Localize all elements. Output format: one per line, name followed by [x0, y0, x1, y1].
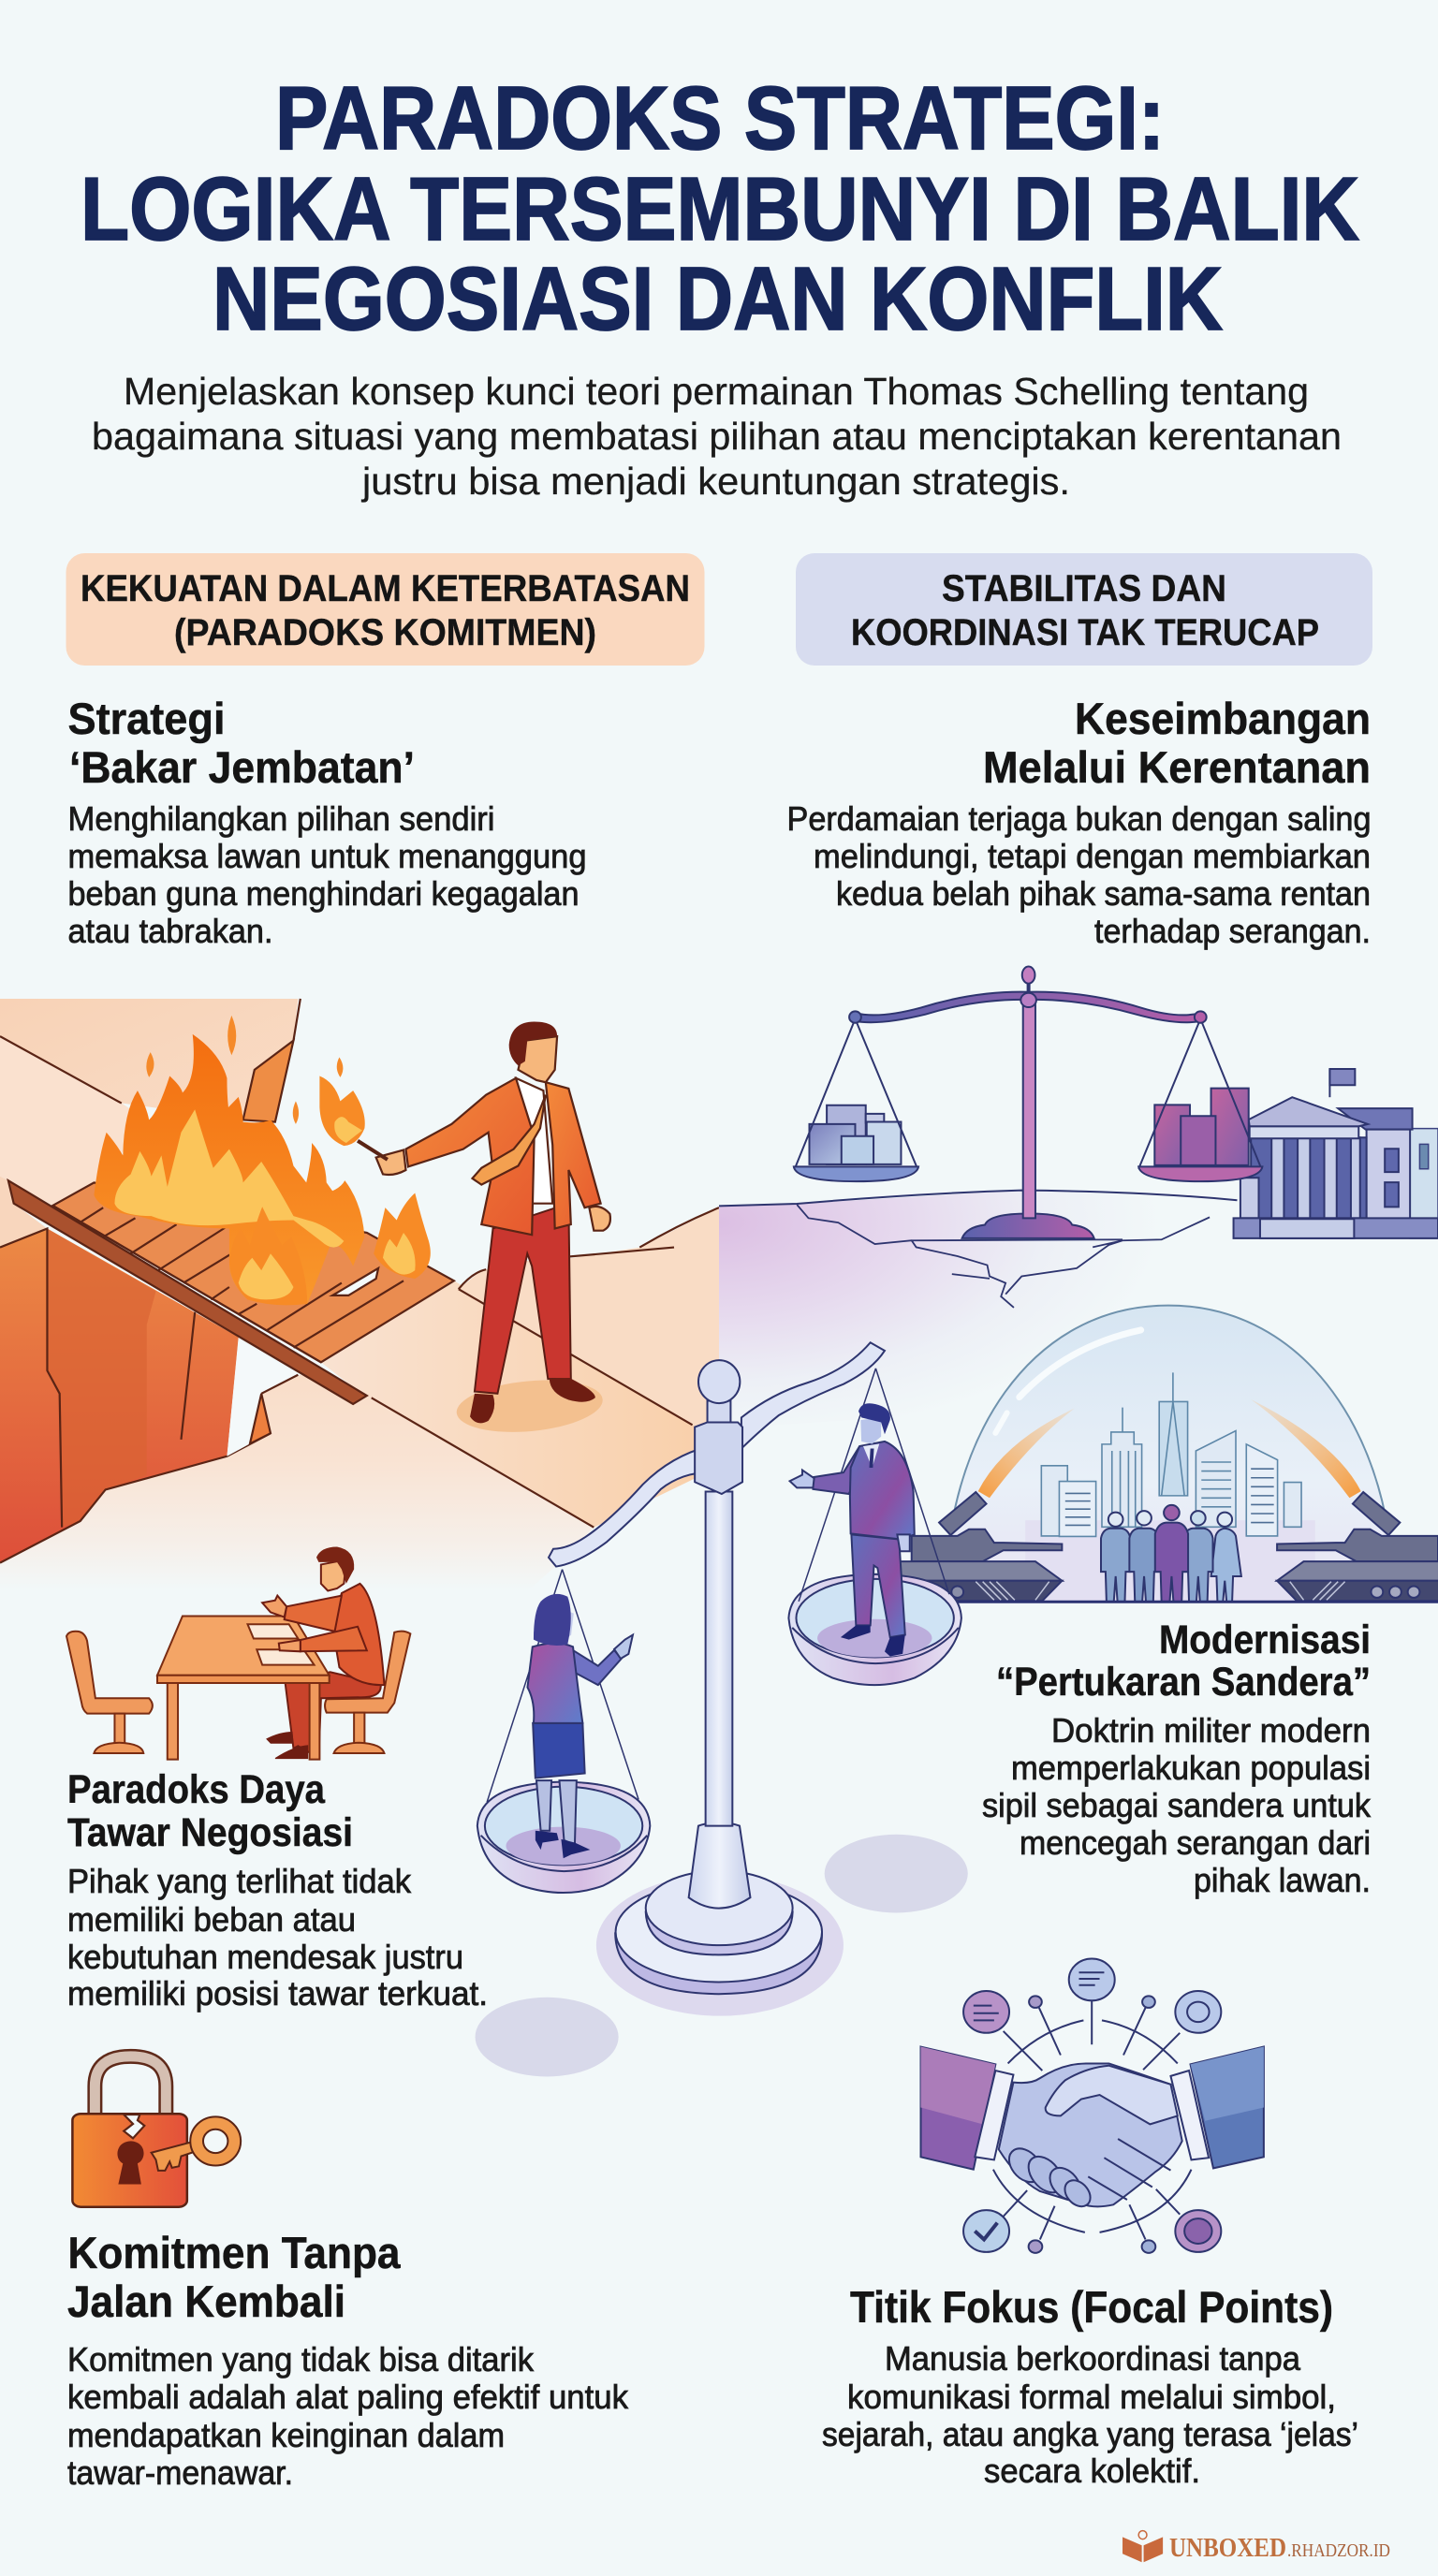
orange rock face	[243, 1041, 293, 1122]
left pan front rim	[481, 1836, 647, 1871]
text block: strategi bakar jembatan: Strategi	[67, 694, 225, 743]
text block: strategi bakar jembatan: Menghilangkan pilihan sendiri	[67, 799, 494, 838]
scale pillar	[706, 1491, 732, 1826]
title: NEGOSIASI DAN KONFLIK	[213, 249, 1223, 349]
right sleeve	[1191, 2047, 1264, 2168]
lavender ground	[719, 1191, 1438, 1428]
text block: titik fokus: sejarah, atau angka yang terasa ‘jelas’	[822, 2415, 1358, 2453]
glass dome with city	[945, 1306, 1394, 1602]
right tank	[1251, 1399, 1438, 1601]
text block: modernisasi pertukaran sandera: pihak lawan.	[1194, 1861, 1371, 1899]
scale head	[695, 1360, 742, 1494]
text block: paradoks daya tawar negosiasi: Tawar Negosiasi	[67, 1810, 353, 1855]
man figure	[790, 1403, 915, 1656]
column header: kekuatan dalam keterbatasan: (PARADOKS KOMITMEN)	[174, 612, 596, 653]
text block: strategi bakar jembatan: beban guna menghindari kegagalan	[67, 874, 579, 913]
upper ledge	[0, 1036, 147, 1206]
text block: komitmen tanpa jalan kembali: Komitmen yang tidak bisa ditarik	[67, 2340, 535, 2378]
logo text: .RHADZOR.ID	[1287, 2540, 1390, 2561]
small nodes	[1029, 1996, 1155, 2253]
far ground	[459, 1208, 719, 1440]
gap between cliffs	[227, 1339, 298, 1456]
text block: modernisasi pertukaran sandera: Modernisasi	[1159, 1617, 1371, 1662]
subtitle: bagaimana situasi yang membatasi pilihan atau menciptakan kerentanan	[92, 415, 1342, 458]
building	[1234, 1069, 1438, 1238]
clasped hands	[999, 2063, 1182, 2211]
canyon cliff	[0, 1228, 271, 1563]
ground cracks	[797, 1205, 1210, 1308]
seated man	[262, 1547, 384, 1685]
right chair	[325, 1632, 410, 1753]
table	[157, 1617, 330, 1760]
text block: komitmen tanpa jalan kembali: Jalan Kembali	[67, 2276, 345, 2326]
left scale pan with boxes	[794, 1018, 918, 1181]
text block: modernisasi pertukaran sandera: Doktrin militer modern	[1051, 1711, 1371, 1749]
text block: komitmen tanpa jalan kembali: tawar-menawar.	[67, 2453, 293, 2492]
left pan back with chains	[477, 1570, 650, 1893]
logo icon: open book	[1123, 2531, 1163, 2562]
node: globe	[1175, 2210, 1221, 2252]
text block: titik fokus: Manusia berkoordinasi tanpa	[885, 2339, 1301, 2378]
illustration: central balance scale with figures	[476, 1342, 968, 2076]
big flames	[94, 1016, 431, 1305]
group of civilians	[1101, 1505, 1241, 1602]
subtitle	[92, 370, 1342, 503]
illustration: balance scale, building and ground	[719, 967, 1438, 1602]
man with torch	[319, 1022, 610, 1438]
column header: kekuatan dalam keterbatasan: KEKUATAN DALAM KETERBATASAN	[81, 568, 690, 609]
text block: modernisasi pertukaran sandera: memperlakukan populasi	[1011, 1749, 1371, 1787]
scale arm left	[549, 1446, 709, 1567]
text block: modernisasi pertukaran sandera	[982, 1617, 1372, 1899]
illustration: handshake with focal nodes	[921, 1959, 1264, 2562]
path band	[321, 1281, 719, 1528]
scale base	[615, 1822, 822, 1994]
top scale stand	[849, 967, 1207, 1238]
scale arm right	[741, 1342, 885, 1449]
title	[81, 68, 1359, 349]
text block: keseimbangan melalui kerentanan: Perdamaian terjaga bukan dengan saling	[786, 799, 1371, 838]
node: document	[1069, 1959, 1115, 2000]
network arcs and spokes	[993, 2000, 1191, 2239]
text block: keseimbangan melalui kerentanan: melindungi, tetapi dengan membiarkan	[814, 837, 1371, 875]
text block: keseimbangan melalui kerentanan: kedua belah pihak sama-sama rentan	[836, 874, 1371, 913]
lower ground	[0, 1375, 594, 1591]
text block: komitmen tanpa jalan kembali: kembali adalah alat paling efektif untuk	[67, 2378, 629, 2416]
text block: paradoks daya tawar negosiasi	[67, 1767, 488, 2012]
illustration: negotiation table	[66, 1547, 410, 1760]
column header: stabilitas dan koordinasi: KOORDINASI TAK TERUCAP	[851, 612, 1319, 653]
column header: kekuatan dalam keterbatasan	[66, 553, 704, 666]
text block: keseimbangan melalui kerentanan: Melalui Kerentanan	[983, 742, 1371, 792]
text block: komitmen tanpa jalan kembali: Komitmen Tanpa	[67, 2228, 401, 2277]
city skyline	[1025, 1372, 1315, 1602]
text block: modernisasi pertukaran sandera: sipil sebagai sandera untuk	[982, 1786, 1372, 1824]
padlock shackle	[95, 2056, 166, 2116]
column header: stabilitas dan koordinasi: STABILITAS DAN	[942, 568, 1226, 609]
logo text	[1169, 2533, 1390, 2563]
text block: paradoks daya tawar negosiasi: memiliki beban atau	[67, 1900, 356, 1939]
text block: strategi bakar jembatan: ‘Bakar Jembatan’	[69, 742, 415, 792]
floor shadows	[476, 1835, 968, 2076]
text block: strategi bakar jembatan: memaksa lawan untuk menanggung	[67, 837, 586, 875]
left tank	[900, 1409, 1075, 1601]
subtitle: justru bisa menjadi keuntungan strategis.	[361, 460, 1070, 503]
text block: paradoks daya tawar negosiasi: Pihak yang terlihat tidak	[67, 1862, 412, 1900]
keyhole	[117, 2141, 144, 2185]
left sleeve	[921, 2047, 995, 2170]
text block: titik fokus: komunikasi formal melalui simbol,	[847, 2378, 1336, 2416]
text block: paradoks daya tawar negosiasi: Paradoks Daya	[67, 1767, 326, 1812]
text block: keseimbangan melalui kerentanan: Keseimbangan	[1075, 694, 1371, 743]
text block: keseimbangan melalui kerentanan: terhadap serangan.	[1094, 912, 1371, 950]
bridge deck	[8, 1180, 454, 1404]
cuffs	[975, 2071, 1209, 2159]
text block: paradoks daya tawar negosiasi: memiliki posisi tawar terkuat.	[67, 1974, 488, 2012]
subtitle: Menjelaskan konsep kunci teori permainan Thomas Schelling tentang	[124, 370, 1309, 413]
text block: modernisasi pertukaran sandera: “Pertukaran Sandera”	[996, 1660, 1371, 1705]
key	[152, 2116, 241, 2171]
illustration: burning bridge scene	[0, 999, 719, 1591]
dome ground line	[958, 1601, 1438, 1603]
man trousers and shoes	[266, 1672, 381, 1759]
text block: titik fokus: Titik Fokus (Focal Points)	[850, 2282, 1333, 2332]
right pan back with chains	[788, 1368, 961, 1685]
text block: modernisasi pertukaran sandera: mencegah serangan dari	[1020, 1823, 1371, 1862]
small rock	[250, 1394, 271, 1443]
sliver under bridge	[0, 1177, 47, 1248]
title: PARADOKS STRATEGI:	[275, 68, 1165, 168]
text block: strategi bakar jembatan: atau tabrakan.	[67, 912, 273, 950]
node: network	[1175, 1991, 1221, 2033]
left chair	[66, 1632, 153, 1753]
padlock body	[72, 2114, 187, 2207]
column header: stabilitas dan koordinasi	[796, 553, 1372, 666]
crack	[124, 2115, 144, 2138]
icon: broken padlock with key	[72, 2056, 241, 2207]
woman figure	[527, 1594, 633, 1858]
text block: keseimbangan melalui kerentanan	[786, 694, 1371, 950]
node: text purple	[963, 1991, 1009, 2033]
text block: titik fokus: secara kolektif.	[984, 2452, 1200, 2490]
right scale pan with boxes	[1138, 1018, 1262, 1181]
logo text: UNBOXED	[1169, 2533, 1286, 2563]
top left cliff wall	[0, 999, 298, 1120]
node: check	[963, 2210, 1009, 2252]
ground outline	[719, 1191, 1237, 1206]
text block: paradoks daya tawar negosiasi: kebutuhan mendesak justru	[67, 1938, 463, 1976]
text block: strategi bakar jembatan	[67, 694, 586, 950]
text block: komitmen tanpa jalan kembali: mendapatkan keinginan dalam	[67, 2416, 505, 2454]
text block: komitmen tanpa jalan kembali	[67, 2228, 629, 2492]
text block: titik fokus	[822, 2282, 1358, 2490]
ground outlines	[372, 1208, 719, 1528]
